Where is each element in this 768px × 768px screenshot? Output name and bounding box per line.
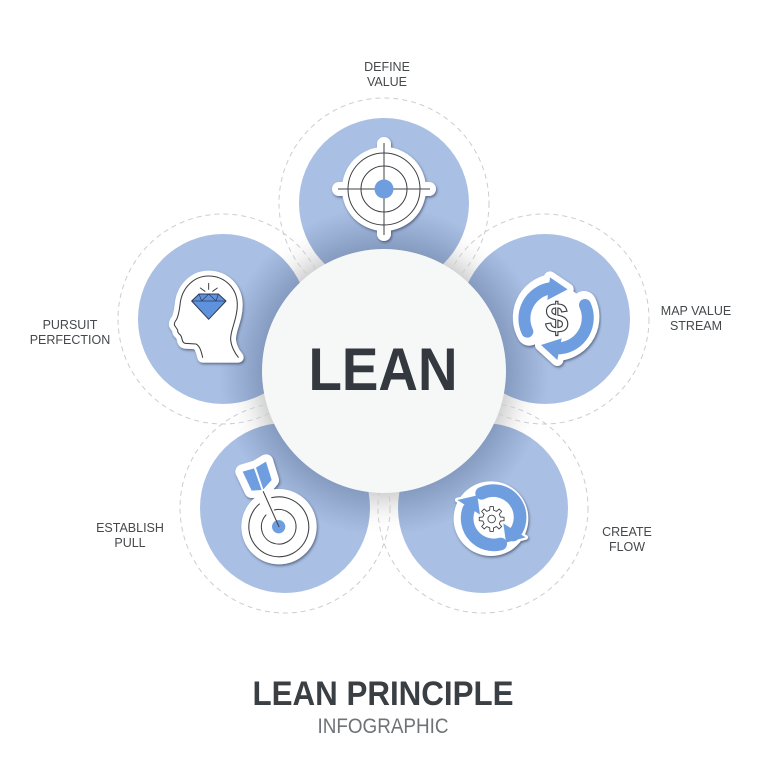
icon: crosshair target — [338, 143, 430, 235]
label: define value: DEFINE — [364, 60, 410, 74]
icon: gear with cycle arrows — [454, 481, 528, 556]
background shadow around hub — [219, 206, 549, 536]
label: establish pull: PULL — [114, 536, 146, 550]
icon: arrow hitting bullseye — [241, 462, 317, 564]
dashed rings around petals — [118, 98, 649, 613]
panel: create flow petal — [398, 423, 568, 593]
panel: pursuit perfection petal — [138, 234, 308, 404]
label: pursuit perfection: PERFECTION — [30, 333, 110, 347]
label: map value stream: MAP VALUE — [661, 304, 731, 318]
panel: define value petal — [299, 118, 469, 288]
icon: dollar with cycle arrows — [524, 277, 588, 360]
label: create flow: FLOW — [609, 540, 645, 554]
subtitle: INFOGRAPHIC — [318, 715, 448, 738]
panel: central hub — [262, 249, 506, 493]
icon: head with diamond — [174, 276, 238, 357]
icon: dollar with cycle arrows: $ — [545, 295, 568, 342]
label: establish pull: ESTABLISH — [96, 521, 164, 535]
panel: establish pull petal — [200, 423, 370, 593]
title: LEAN PRINCIPLE — [252, 675, 514, 713]
label: pursuit perfection: PURSUIT — [43, 318, 97, 332]
panel: map value stream petal — [460, 234, 630, 404]
heading: hub word: LEAN — [308, 336, 458, 403]
label: map value stream: STREAM — [670, 319, 722, 333]
label: create flow: CREATE — [602, 525, 652, 539]
label: define value: VALUE — [367, 75, 407, 89]
